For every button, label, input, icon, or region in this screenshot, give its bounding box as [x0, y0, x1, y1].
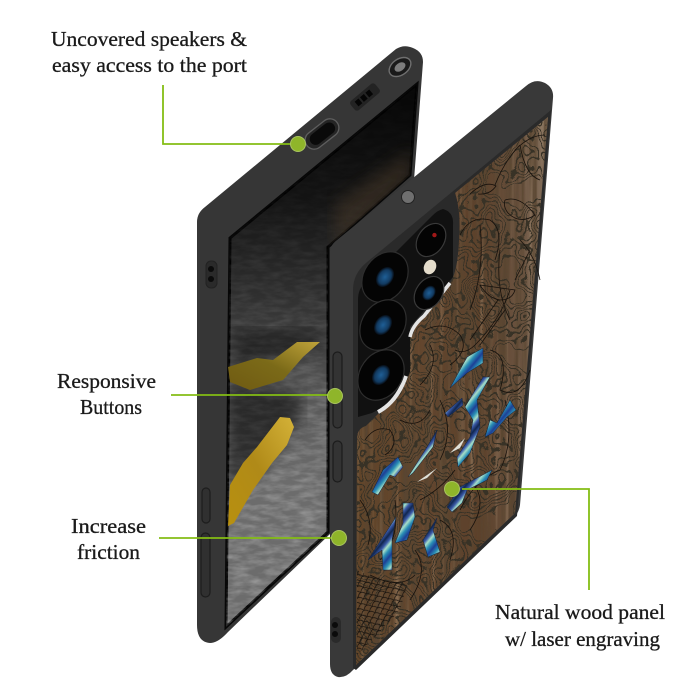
white accent trim	[410, 283, 450, 337]
white inlay slivers	[417, 438, 465, 482]
leader line	[462, 489, 589, 590]
callout: responsive buttons	[57, 369, 342, 419]
right phone: back view with wood panel	[330, 81, 553, 677]
yellow leaf lower	[228, 417, 294, 526]
label text: friction	[77, 540, 141, 564]
label text	[71, 514, 146, 564]
bottom holes	[331, 617, 341, 643]
lens small blue	[408, 271, 450, 315]
marker dot	[328, 388, 342, 404]
left phone: front view with case	[197, 46, 423, 643]
leader line	[163, 85, 298, 144]
mic dot	[402, 190, 414, 204]
marker dot	[332, 530, 346, 546]
camera hole top	[386, 54, 414, 80]
label text	[57, 369, 156, 419]
left case body	[197, 46, 423, 643]
lens 3	[348, 341, 414, 409]
left phone screen	[226, 84, 417, 627]
side holes	[206, 261, 217, 288]
left side buttons	[201, 488, 210, 597]
leader line	[159, 537, 339, 539]
lens 1	[352, 243, 418, 311]
inner rim shade	[353, 110, 551, 670]
label text: w/ laser engraving	[505, 627, 660, 651]
speaker cutout	[349, 82, 381, 112]
label text	[495, 600, 665, 651]
label text: Buttons	[80, 395, 142, 419]
engraving lines	[360, 135, 545, 600]
label text: Responsive	[57, 369, 156, 393]
right case body	[330, 81, 553, 677]
flash	[421, 258, 439, 276]
label text: Increase	[71, 514, 146, 538]
marker dot	[290, 136, 306, 152]
right side buttons	[333, 352, 342, 482]
scale engraving	[357, 570, 408, 655]
heading text: easy access to the port	[52, 53, 247, 77]
yellow leaf upper	[228, 342, 320, 390]
callout: speakers and port	[51, 27, 306, 152]
wood panel	[356, 117, 548, 665]
charging port	[301, 115, 343, 153]
leader line	[171, 394, 336, 396]
lens 2	[350, 291, 416, 359]
marker dot	[444, 482, 460, 496]
camera island	[348, 209, 453, 417]
callout: natural wood panel	[444, 482, 665, 651]
heading text: Uncovered speakers &	[51, 27, 247, 51]
heading text	[51, 27, 247, 77]
callout: increase friction	[71, 514, 346, 564]
abalone inlay	[368, 348, 516, 570]
label text: Natural wood panel	[495, 600, 665, 624]
lens small red	[410, 218, 452, 262]
